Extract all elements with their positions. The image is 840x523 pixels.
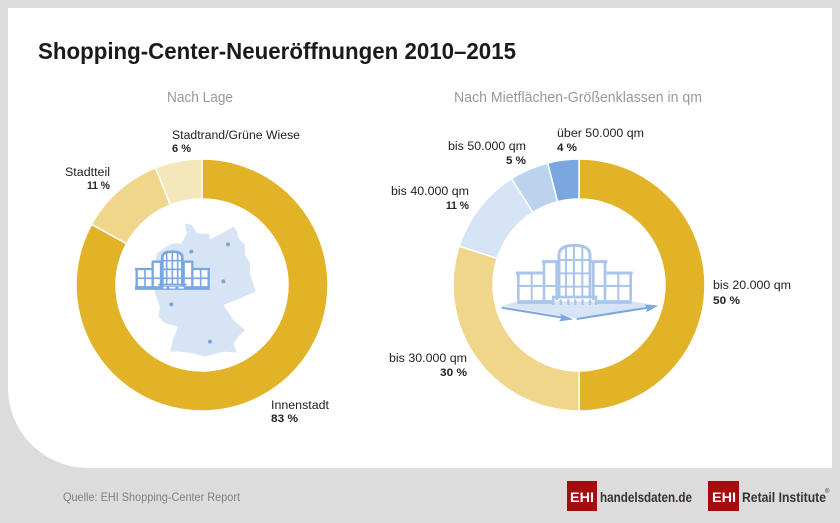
label: bis 40.000 qm: 11 % (446, 200, 469, 212)
label: bis 50.000 qm: bis 50.000 qm (448, 141, 526, 153)
label: Stadtrand/Grüne Wiese (172, 130, 300, 155)
logo: EHI handelsdaten.de (567, 481, 692, 511)
donut chart: Mietflächen-Größenklassen (453, 159, 705, 411)
floor area (502, 301, 658, 318)
segment: über 50.000 qm 4 % (548, 159, 579, 202)
arrow: floor width (577, 305, 658, 319)
logo: EHI Retail Institute: EHI (712, 490, 736, 505)
logo: EHI Retail Institute (708, 481, 830, 511)
arrow: floor depth (502, 308, 573, 321)
segment: bis 30.000 qm 30 % (453, 246, 579, 411)
label: bis 50.000 qm (448, 141, 526, 167)
label: bis 30.000 qm: 30 % (440, 367, 467, 379)
label: bis 20.000 qm: bis 20.000 qm (713, 280, 791, 292)
map location dots (169, 242, 230, 344)
segment: bis 20.000 qm 50 % (579, 159, 705, 411)
label: bis 50.000 qm: 5 % (506, 155, 526, 167)
label: über 50.000 qm: 4 % (557, 142, 577, 154)
segment: bis 40.000 qm 11 % (459, 179, 533, 258)
label: bis 40.000 qm: bis 40.000 qm (391, 186, 469, 198)
label: bis 30.000 qm: bis 30.000 qm (389, 353, 467, 365)
heading: Nach Lage: Nach Lage (167, 90, 233, 106)
segment: bis 50.000 qm 5 % (512, 163, 558, 212)
label: bis 30.000 qm (389, 353, 467, 379)
heading: Nach Mietflächen-Größenklassen: Nach Mietflächen-Größenklassen in qm (454, 90, 702, 106)
logo: EHI Retail Institute: ® (825, 488, 830, 495)
segment: Stadtrand 6 % (156, 159, 202, 205)
source note: Quelle: EHI Shopping-Center Report (63, 490, 241, 504)
segment: Innenstadt 83 % (76, 159, 328, 411)
segment: Stadtteil 11 % (92, 168, 170, 244)
label: Stadtrand/Grüne Wiese: 6 % (172, 143, 191, 155)
donut chart: Nach Lage (76, 159, 328, 411)
label: Stadtteil: Stadtteil (65, 167, 110, 179)
label: Innenstadt: 83 % (271, 413, 298, 425)
logo: EHI handelsdaten.de: EHI (570, 490, 594, 505)
map of Germany (153, 223, 256, 357)
label: Stadtrand/Grüne Wiese: Stadtrand/Grüne Wiese (172, 130, 300, 142)
icon: Germany map with building (135, 223, 256, 357)
label: Innenstadt: Innenstadt (271, 400, 330, 412)
label: bis 20.000 qm: 50 % (713, 295, 740, 307)
label: über 50.000 qm (557, 128, 644, 154)
logo: EHI handelsdaten.de: handelsdaten.de (600, 489, 692, 505)
icon: building on floor area with arrows (502, 245, 658, 321)
label: Innenstadt (271, 400, 330, 425)
logo: EHI Retail Institute: Retail Institute (742, 489, 826, 505)
title: Shopping-Center-Neueröffnungen 2010–2015 (38, 38, 516, 64)
label: über 50.000 qm: über 50.000 qm (557, 128, 644, 140)
label: bis 20.000 qm (713, 280, 791, 307)
building (135, 251, 210, 288)
label: bis 40.000 qm (391, 186, 469, 212)
label: Stadtteil: 11 % (87, 180, 110, 192)
label: Stadtteil (65, 167, 110, 192)
building (516, 245, 633, 305)
